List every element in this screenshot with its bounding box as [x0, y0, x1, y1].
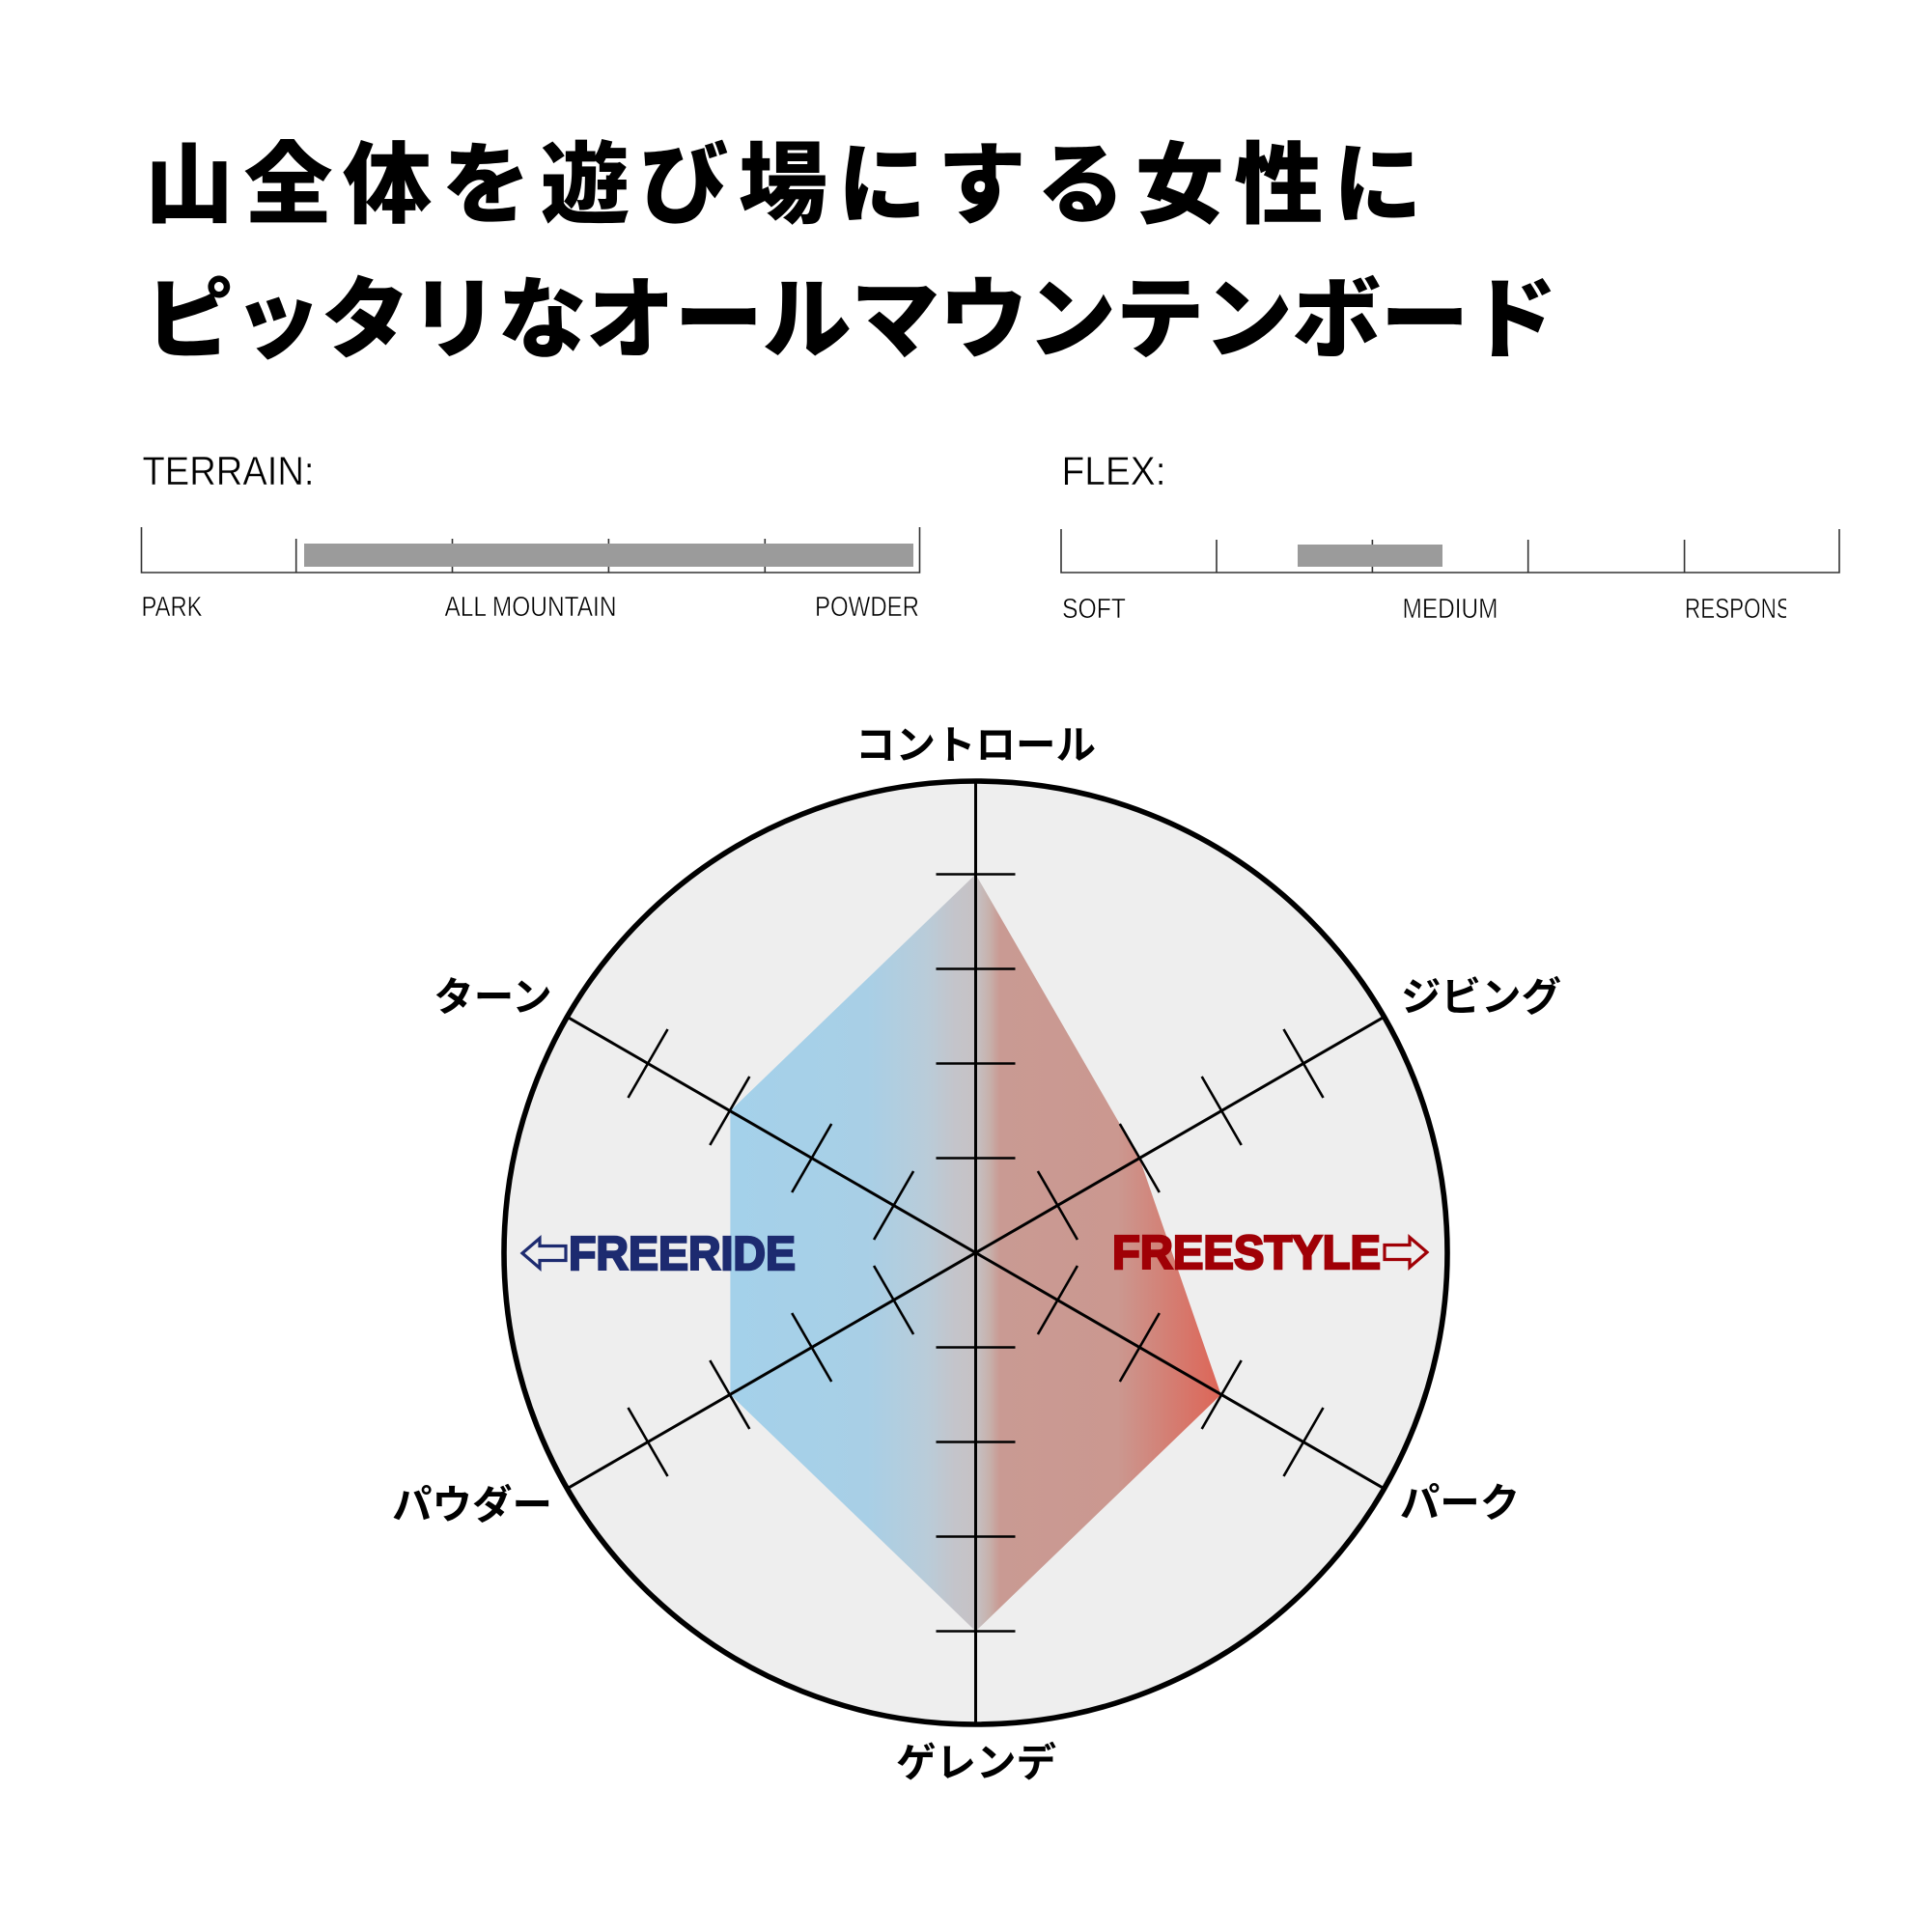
radar ticks [628, 875, 1323, 1632]
terrain label all mountain: ALL MOUNTAIN [444, 592, 616, 623]
terrain label park: PARK [141, 592, 203, 623]
freestyle arrow [1385, 1238, 1427, 1267]
axis label top: コントロール [855, 722, 1096, 768]
title [145, 137, 1556, 370]
flex label medium: MEDIUM [1402, 594, 1498, 625]
panel: terrain scale [141, 448, 919, 623]
terrain label powder: POWDER [815, 592, 919, 623]
axis label bottom: ゲレンデ [896, 1740, 1056, 1785]
freeride label: FREERIDE [569, 1228, 796, 1280]
radar spokes [567, 781, 1385, 1724]
radar outer ring [504, 781, 1447, 1724]
terrain axis [141, 527, 919, 573]
flex label responsive: RESPONSIVE [1685, 594, 1826, 625]
flex label soft: SOFT [1062, 594, 1126, 625]
axis label lower right: パーク [1400, 1480, 1520, 1525]
freestyle label: FREESTYLE [1112, 1227, 1381, 1279]
flex axis [1061, 529, 1839, 573]
title line 2: ピッタリなオールマウンテンボード [145, 271, 1556, 370]
axis label upper right: ジビング [1401, 974, 1561, 1020]
flex heading: FLEX: [1062, 448, 1166, 493]
flex value bar [1298, 545, 1442, 567]
terrain value bar [304, 544, 913, 567]
title line 1: 山全体を遊び場にする女性に [145, 137, 1432, 236]
radar chart [392, 722, 1561, 1785]
radar background disc [504, 781, 1447, 1724]
freeride arrow [522, 1238, 566, 1269]
axis label upper left: ターン [434, 974, 552, 1020]
axis label lower left: パウダー [392, 1482, 552, 1527]
panel: flex scale [1061, 448, 1839, 625]
radar value polygon [730, 875, 1221, 1632]
terrain heading: TERRAIN: [143, 448, 315, 493]
